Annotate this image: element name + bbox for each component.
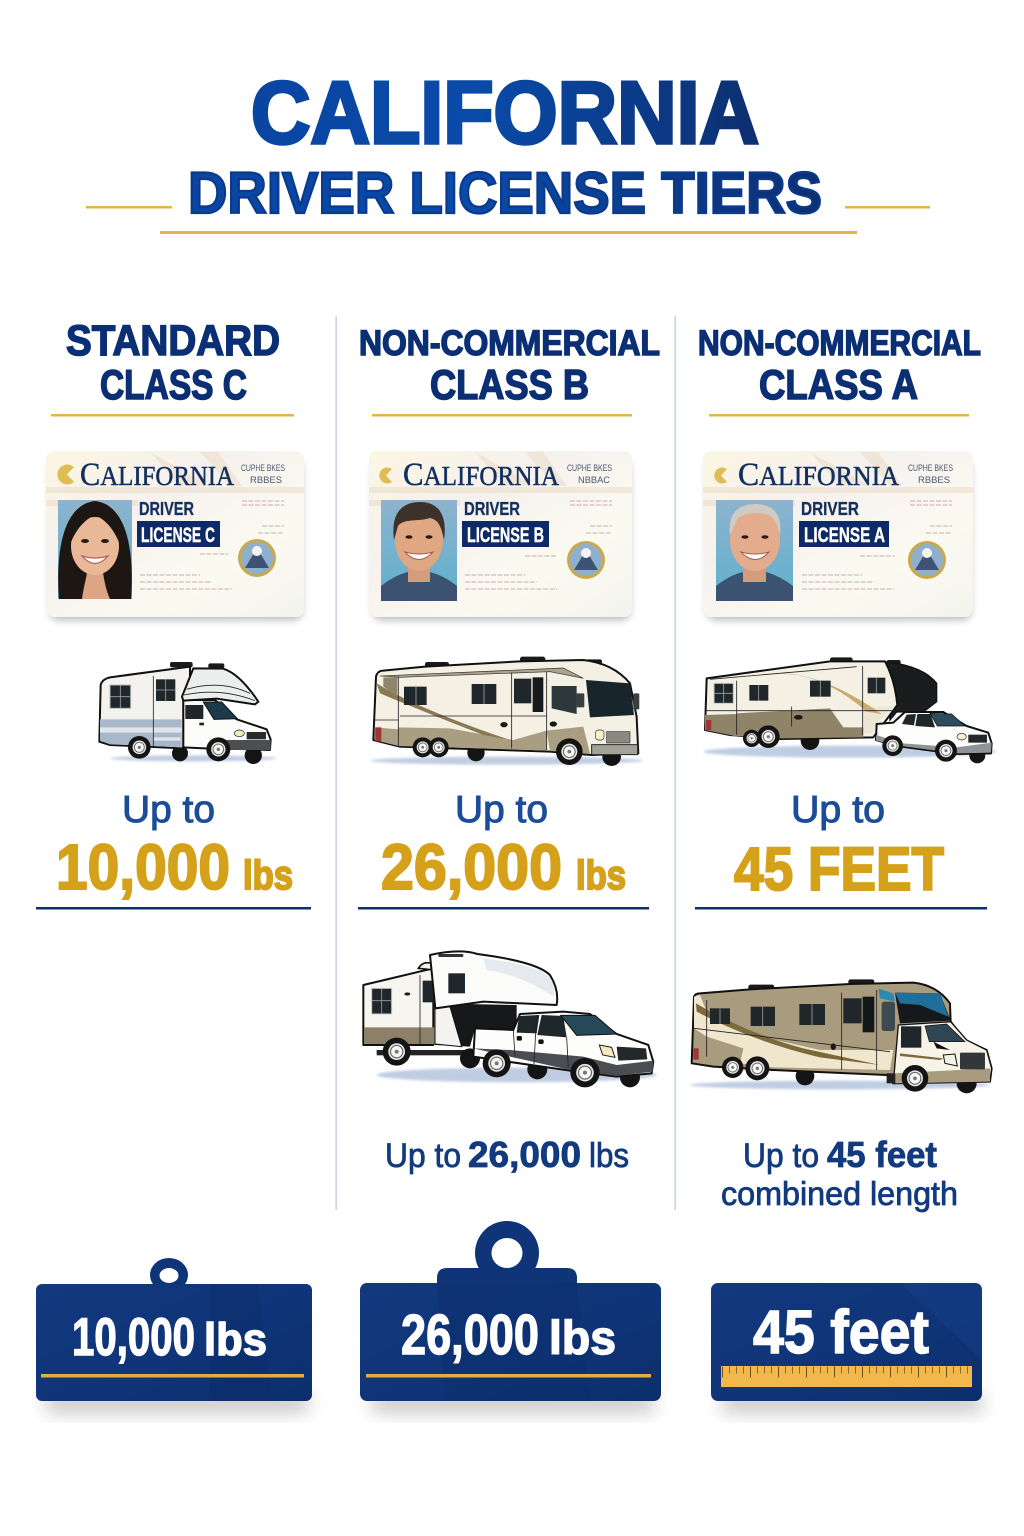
- license card: class B: NBBAC: [578, 475, 611, 485]
- license card: class A: [703, 451, 973, 620]
- weight limit: 26,000 lbs: 26,000: [381, 831, 562, 903]
- caption: up to 26,000 lbs: lbs: [589, 1137, 629, 1175]
- license card: class B: [369, 451, 632, 620]
- badge: 26,000 lbs weight: [360, 1221, 661, 1412]
- badge: 10,000 lbs weight: lbs: [204, 1314, 267, 1365]
- title: DRIVER LICENSE TIERS: [188, 161, 822, 226]
- weight limit: 10,000 lbs: 10,000: [56, 831, 230, 903]
- title: CALIFORNIA: [251, 63, 759, 162]
- license card: class C: CUPHE BKES: [241, 463, 285, 473]
- license card: class B: CUPHE BKES: [567, 463, 612, 473]
- seal: [567, 541, 605, 579]
- heading: non-commercial class B: NON-COMMERCIAL: [359, 324, 660, 363]
- heading: standard class C: CLASS C: [100, 361, 247, 408]
- license card: class C: LICENSE C: [141, 524, 215, 547]
- caption: up to 26,000 lbs: 26,000: [468, 1134, 581, 1175]
- photo: man with dark hair: [381, 500, 457, 601]
- weight limit: 26,000 lbs: Up to: [455, 789, 548, 831]
- photo: older man: [716, 500, 793, 601]
- heading: standard class C: [51, 317, 294, 416]
- badge: 10,000 lbs weight: [36, 1258, 312, 1412]
- panel: non-commercial class A: [690, 324, 997, 1412]
- caption: up to 26,000 lbs: Up to: [385, 1137, 461, 1175]
- license card: class C: CALIFORNIA: [80, 457, 234, 493]
- caption: up to 45 feet combined length: [721, 1134, 958, 1212]
- license card: class C: RBBES: [250, 475, 282, 485]
- badge: 26,000 lbs weight: lbs: [549, 1311, 616, 1364]
- badge: 10,000 lbs weight: 10,000: [72, 1308, 195, 1367]
- weight limit: 10,000 lbs: [36, 789, 311, 910]
- photo: woman: [58, 500, 132, 599]
- weight limit: 10,000 lbs: lbs: [243, 852, 293, 898]
- license card: class A: CALIFORNIA: [738, 457, 899, 493]
- weight limit: 10,000 lbs: Up to: [122, 789, 215, 831]
- title: [86, 63, 930, 234]
- license card: class B: CALIFORNIA: [403, 457, 559, 493]
- caption: up to 45 feet combined length: combined length: [721, 1175, 958, 1212]
- weight limit: 26,000 lbs: [358, 789, 649, 910]
- weight limit: 45 feet: [695, 789, 987, 910]
- heading: non-commercial class B: CLASS B: [430, 361, 589, 408]
- license card: class A: LICENSE A: [804, 524, 885, 547]
- license card: class A: RBBES: [918, 475, 950, 485]
- license card: class A: DRIVER: [801, 499, 859, 519]
- badge: 26,000 lbs weight: 26,000: [401, 1303, 539, 1367]
- heading: non-commercial class A: NON-COMMERCIAL: [698, 324, 981, 363]
- weight limit: 45 feet: 45 FEET: [734, 835, 944, 903]
- caption: up to 26,000 lbs: [385, 1134, 629, 1175]
- weight limit: 26,000 lbs: lbs: [576, 852, 626, 898]
- seal: [238, 539, 276, 577]
- icon: ruler: [721, 1366, 972, 1387]
- heading: non-commercial class A: [698, 324, 981, 416]
- license card: class B: LICENSE B: [467, 524, 544, 547]
- vehicle: fifth-wheel trailer and pickup: [363, 951, 657, 1087]
- license card: class C: [46, 451, 304, 620]
- badge: 45 feet with ruler: [711, 1283, 982, 1412]
- caption: up to 45 feet combined length: Up to: [743, 1137, 819, 1175]
- badge: 45 feet with ruler: 45 feet: [753, 1298, 929, 1366]
- seal: [908, 541, 946, 579]
- weight limit: 45 feet: Up to: [791, 789, 885, 831]
- heading: non-commercial class A: CLASS A: [759, 361, 918, 408]
- vehicle: class C motorhome: [99, 662, 277, 764]
- license card: class B: DRIVER: [464, 499, 520, 519]
- vehicle: class A motorhome: [690, 979, 992, 1093]
- panel: standard class C: [36, 317, 312, 1412]
- license card: class A: CUPHE BKES: [908, 463, 953, 473]
- vehicle: class B motorhome: [370, 657, 643, 766]
- caption: up to 45 feet combined length: 45 feet: [827, 1134, 937, 1175]
- heading: non-commercial class B: [359, 324, 660, 416]
- vehicle: class A trailer and pickup: [703, 657, 997, 763]
- heading: standard class C: STANDARD: [66, 317, 280, 365]
- panel: non-commercial class B: [358, 324, 661, 1412]
- license card: class C: DRIVER: [139, 499, 194, 519]
